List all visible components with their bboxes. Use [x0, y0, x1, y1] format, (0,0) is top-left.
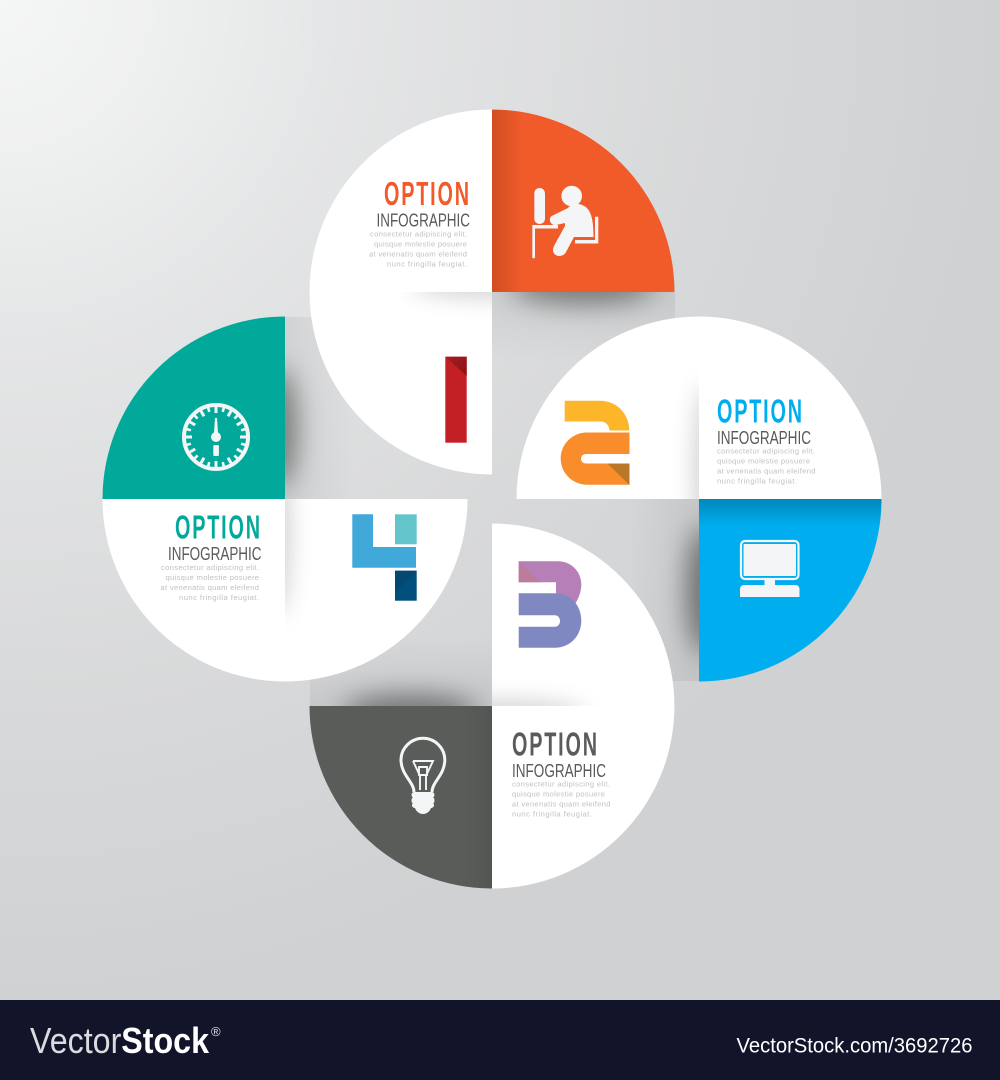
- text: option 4: at venenatis quam eleifend: [160, 583, 259, 592]
- panel: circle 1: [310, 110, 674, 475]
- text: option 1: nunc fringilla feugiat.: [387, 260, 467, 268]
- footer url: VectorStock.com/3692726: [736, 1034, 973, 1058]
- icon: computer monitor: [740, 541, 800, 597]
- fold shade on upper quadrant of circle 3: [492, 691, 582, 706]
- white quadrants of circle 4: [102, 499, 468, 682]
- number 3: [519, 561, 581, 648]
- blue fold shade: [699, 499, 882, 526]
- teal quadrant: [102, 316, 285, 499]
- gray fold shade: [462, 706, 492, 888]
- text: option 2: quisque molestie posuere: [717, 456, 810, 466]
- text: option 3: [512, 725, 610, 818]
- text: option 4: nunc fringilla feugiat.: [179, 593, 259, 602]
- text: option 2: at venenatis quam eleifend: [717, 466, 816, 476]
- panel: circle 3: [310, 524, 674, 888]
- number 1: [445, 357, 467, 443]
- fold shade on right quadrant of circle 4: [285, 499, 300, 612]
- white quadrants of circle 2: [516, 317, 882, 499]
- gray quadrant: [310, 706, 492, 888]
- text: option 3: at venenatis quam eleifend: [512, 800, 610, 808]
- blue quadrant: [699, 499, 882, 682]
- cast shadows on background: [285, 292, 699, 706]
- orange fold shade: [492, 110, 522, 292]
- text: option 3: OPTION: [512, 725, 597, 763]
- text: option 2: INFOGRAPHIC: [717, 427, 811, 448]
- panel: circle 2: [516, 317, 882, 682]
- text: option 1: at venenatis quam eleifend: [369, 250, 467, 258]
- text: option 4: OPTION: [175, 508, 260, 546]
- logo: VectorStock: VectorStock: [30, 1020, 210, 1061]
- text: option 2: OPTION: [717, 392, 802, 430]
- text: option 3: nunc fringilla feugiat.: [512, 810, 592, 818]
- text: option 1: consectetur adipiscing elit.: [370, 230, 467, 238]
- text: option 4: INFOGRAPHIC: [168, 543, 262, 564]
- white quadrants of circle 3: [492, 524, 674, 888]
- text: option 3: consectetur adipiscing elit.: [512, 780, 610, 788]
- text: option 1: quisque molestie posuere: [374, 240, 467, 248]
- icon: light bulb: [401, 738, 445, 814]
- fold shade on left quadrant of circle 2: [684, 388, 699, 499]
- text: option 1: OPTION: [384, 175, 469, 212]
- panel: circle 4: [102, 316, 468, 682]
- number 2: [561, 401, 630, 485]
- fold shade on lower quadrant of circle 1: [413, 292, 492, 307]
- text: option 3: INFOGRAPHIC: [512, 760, 606, 781]
- text: option 2: consectetur adipiscing elit.: [717, 446, 815, 456]
- text: option 1: INFOGRAPHIC: [376, 210, 470, 230]
- text: option 2: [717, 392, 816, 486]
- orange quadrant: [492, 110, 674, 292]
- text: option 3: quisque molestie posuere: [512, 790, 605, 798]
- text: option 2: nunc fringilla feugiat.: [717, 476, 797, 486]
- text: option 4: consectetur adipiscing elit.: [161, 563, 259, 572]
- white quadrants of circle 1: [310, 110, 492, 475]
- icon: clock dial: [184, 405, 248, 469]
- logo: VectorStock: ®: [211, 1024, 221, 1039]
- text: option 4: [160, 508, 262, 602]
- text: option 4: quisque molestie posuere: [166, 573, 259, 582]
- number 4: [352, 514, 417, 601]
- footer bar: [0, 1000, 1000, 1080]
- text: option 1: [369, 175, 470, 268]
- icon: person at desk: [532, 186, 598, 258]
